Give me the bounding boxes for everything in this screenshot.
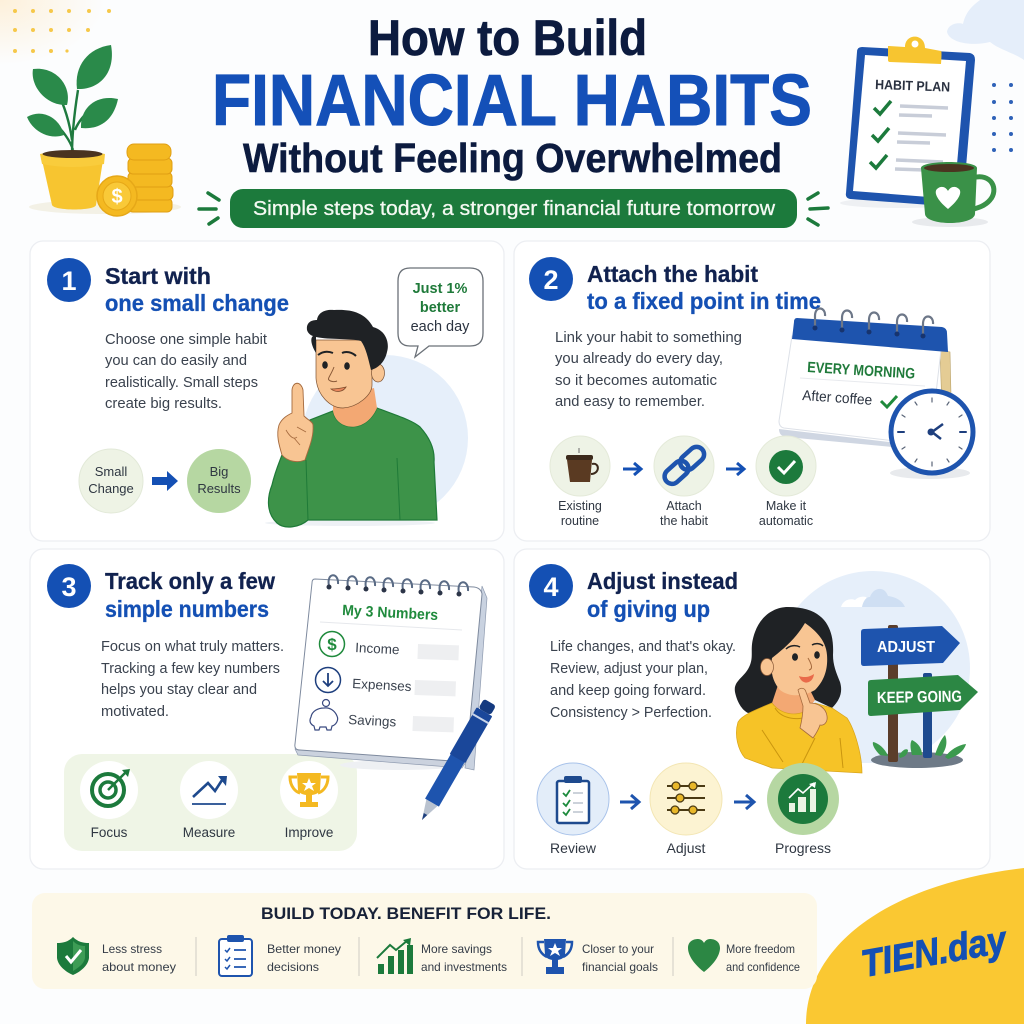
illustration: signposts [861, 625, 978, 768]
number badge 4: 4 [543, 572, 559, 602]
number badge 2: 2 [543, 265, 559, 295]
subtitle pill: Simple steps today, a stronger financial future tomorrow [253, 198, 776, 220]
flow: review [537, 763, 609, 856]
body text step 3: Focus on what truly matters. [101, 639, 284, 655]
illustration: my 3 numbers notepad: Expenses [352, 676, 412, 694]
sign: adjust: ADJUST [877, 639, 935, 656]
arrow [726, 463, 744, 475]
decoration: right sparks [808, 193, 828, 225]
decoration: left sparks [199, 193, 219, 224]
illustration: my 3 numbers notepad: Income [355, 640, 400, 657]
number badge 2 [529, 257, 573, 301]
number badge 1 [47, 258, 91, 302]
illustration: every morning calendar: EVERY MORNING [807, 359, 916, 383]
flow: adjust: Adjust [667, 840, 706, 856]
heading step 1: one small change [105, 290, 289, 316]
benefit: closer to goals: financial goals [582, 960, 658, 974]
panel: focus measure improve strip [64, 754, 357, 851]
icon: cloud [841, 589, 905, 607]
body text step 2: so it becomes automatic [555, 373, 717, 389]
callout: just 1% better each day: better [420, 300, 460, 316]
heading step 3 [105, 568, 275, 622]
decoration: right blue dots [992, 83, 1013, 152]
body text step 3 [101, 639, 284, 720]
callout: just 1% better each day: Just 1% [413, 281, 468, 297]
title line 1: How to Build [368, 10, 647, 66]
benefit: more savings: and investments [421, 960, 507, 974]
callout: just 1% better each day [398, 268, 483, 357]
logo blob [806, 868, 1024, 1024]
body text step 2 [555, 330, 742, 410]
heading step 2: Attach the habit [587, 261, 758, 287]
illustration: man pointing up [265, 310, 468, 527]
icon: trophy improve: Improve [285, 825, 333, 840]
benefit: more savings [377, 938, 507, 974]
benefit: more savings: More savings [421, 942, 492, 956]
icon: blue pen [414, 698, 498, 824]
heading step 2: to a fixed point in time [587, 288, 821, 314]
panel: step 4 [514, 549, 990, 869]
benefit: more freedom: More freedom [726, 942, 795, 956]
illustration: every morning calendar [779, 308, 951, 452]
benefit: better money decisions: decisions [267, 960, 319, 974]
icon: green heart mug [912, 162, 994, 227]
sign: keep going [868, 675, 978, 716]
footer heading: BUILD TODAY. BENEFIT FOR LIFE. [261, 905, 551, 923]
flow: make it automatic: automatic [759, 514, 813, 528]
flow: attach the habit: the habit [660, 514, 708, 528]
heading step 2 [587, 261, 821, 314]
body text step 4: Review, adjust your plan, [550, 661, 708, 677]
flow: existing routine: Existing [558, 499, 602, 513]
illustration: my 3 numbers notepad: Savings [348, 712, 397, 730]
benefit: less stress [57, 937, 176, 975]
logo text: TIEN.day [858, 919, 1011, 986]
body text step 4 [550, 639, 736, 721]
body text step 1: realistically. Small steps [105, 375, 258, 391]
flow: progress [767, 763, 839, 856]
icon: trophy improve [280, 761, 338, 840]
icon: plant pot with coins: $ [111, 186, 123, 208]
number badge 3 [47, 564, 91, 608]
subtitle pill [230, 189, 797, 228]
body text step 4: Consistency > Perfection. [550, 705, 712, 721]
body text step 1 [105, 332, 267, 412]
decoration: top-left yellow dots [13, 9, 111, 53]
body text step 4: Life changes, and that's okay. [550, 639, 736, 655]
body text step 1: you can do easily and [105, 353, 247, 369]
body text step 4: and keep going forward. [550, 683, 706, 699]
benefit: less stress: Less stress [102, 942, 162, 956]
heading step 4: Adjust instead [587, 568, 738, 594]
flow: small change to big results: Change [88, 481, 134, 496]
body text step 2: Link your habit to something [555, 330, 742, 346]
flow: attach the habit [654, 436, 714, 528]
heading step 3: simple numbers [105, 596, 269, 622]
panel: benefits footer [32, 893, 817, 989]
benefit: closer to goals: Closer to your [582, 942, 654, 956]
flow: small change to big results: Results [197, 481, 241, 496]
decoration: top-right cloud [947, 0, 1024, 60]
flow: small change to big results: Small [95, 464, 127, 479]
benefit: better money decisions [219, 935, 341, 976]
body text step 2: and easy to remember. [555, 394, 705, 410]
icon: habit plan clipboard [840, 37, 975, 208]
panel: step 2 [514, 241, 990, 541]
flow: small change to big results [79, 449, 251, 513]
title line 2: FINANCIAL HABITS [212, 61, 812, 141]
flow: existing routine [550, 436, 610, 528]
title [212, 10, 812, 181]
arrow [623, 463, 641, 475]
body text step 3: Tracking a few key numbers [101, 661, 280, 677]
illustration: woman thinking [735, 607, 862, 773]
title line 3: Without Feeling Overwhelmed [243, 135, 782, 181]
benefit: less stress: about money [102, 960, 176, 974]
icon: target focus [80, 761, 138, 840]
icon: plant pot with coins [27, 45, 181, 216]
arrow [734, 795, 754, 809]
illustration: my 3 numbers notepad [295, 575, 487, 770]
body text step 3: motivated. [101, 704, 169, 720]
illustration backdrop circle [798, 571, 970, 763]
body text step 3: helps you stay clear and [101, 682, 257, 698]
icon: chart measure: Measure [183, 825, 235, 840]
body text step 1: create big results. [105, 396, 222, 412]
illustration: my 3 numbers notepad: My 3 Numbers [342, 602, 439, 624]
flow: adjust [650, 763, 722, 856]
icon: habit plan clipboard: HABIT PLAN [875, 77, 950, 95]
sign: keep going: KEEP GOING [877, 689, 962, 707]
heading step 3: Track only a few [105, 568, 275, 594]
heading step 1 [105, 263, 289, 316]
flow: make it automatic: Make it [766, 499, 807, 513]
flow: progress: Progress [775, 840, 831, 856]
body text step 1: Choose one simple habit [105, 332, 267, 348]
flow: small change to big results: Big [210, 464, 228, 479]
callout: just 1% better each day: each day [411, 319, 470, 335]
benefit: better money decisions: Better money [267, 942, 341, 956]
panel: step 1 [30, 241, 504, 541]
heading step 4: of giving up [587, 596, 710, 622]
flow: review: Review [550, 840, 597, 856]
flow: make it automatic [756, 436, 816, 528]
benefit: more freedom: and confidence [726, 960, 800, 974]
body text step 2: you already do every day, [555, 351, 723, 367]
icon: chart measure [180, 761, 238, 840]
arrow [620, 795, 639, 809]
flow: existing routine: routine [561, 514, 599, 528]
illustration: my 3 numbers notepad: $ [327, 635, 337, 654]
illustration: every morning calendar: After coffee [802, 388, 873, 409]
heading step 4 [587, 568, 738, 622]
number badge 1: 1 [61, 266, 77, 296]
number badge 3: 3 [61, 572, 77, 602]
illustration: wall clock [890, 391, 973, 479]
icon: target focus: Focus [91, 825, 128, 840]
number badge 4 [529, 564, 573, 608]
sign: adjust [861, 626, 960, 666]
panel: step 3 [30, 549, 504, 869]
flow: attach the habit: Attach [666, 499, 702, 513]
benefit: more freedom [688, 939, 800, 974]
heading step 1: Start with [105, 263, 211, 289]
benefit: closer to goals [538, 939, 658, 974]
